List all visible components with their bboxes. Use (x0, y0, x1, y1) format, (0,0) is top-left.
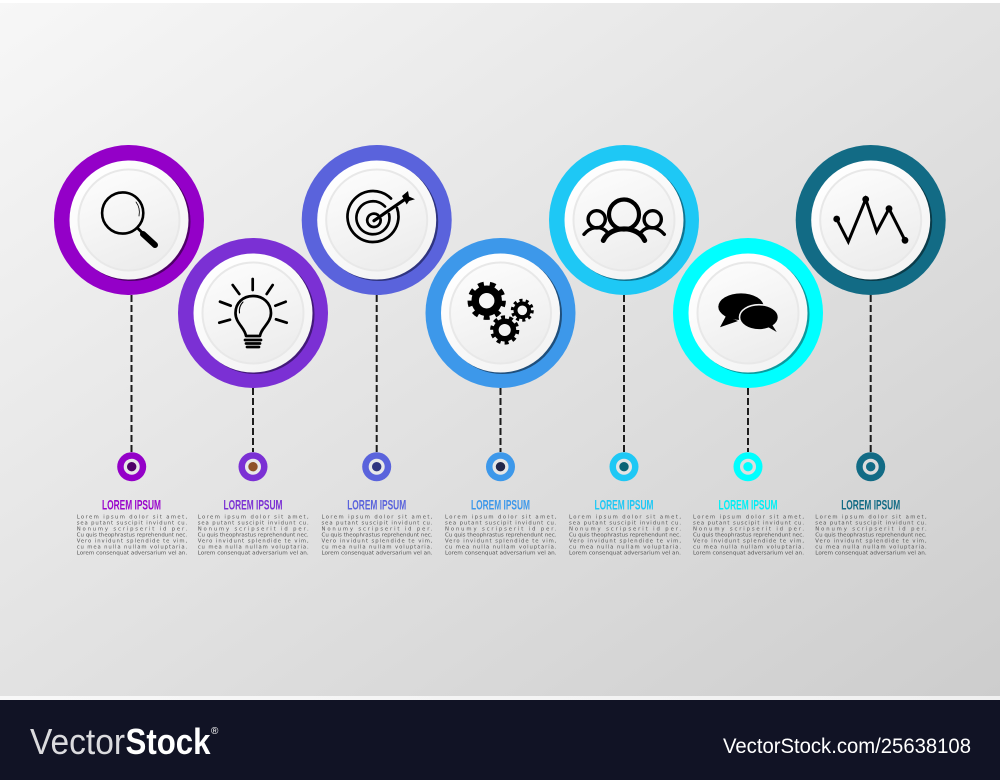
step 3: target (302, 145, 452, 556)
connector 7 (870, 295, 872, 452)
step 4: gears (426, 238, 576, 556)
heading 4: LOREM IPSUM (471, 496, 530, 512)
text block 4: Cu quis theophrastus reprehendunt nec. (445, 532, 557, 538)
marker 1 (117, 452, 146, 481)
text block 3: Cu quis theophrastus reprehendunt nec. (322, 532, 433, 538)
text block 2: cu mea nulla nullam voluptaria. (198, 544, 309, 550)
text block 7: Lorem consenquat adversarium vel an. (815, 550, 927, 556)
heading 6: LOREM IPSUM (718, 496, 778, 512)
text block 2 (198, 514, 309, 556)
text block 1: Lorem ipsum dolor sit amet, (77, 514, 188, 520)
footer logo (30, 721, 211, 762)
marker 5 (610, 452, 638, 481)
text block 2: Lorem ipsum dolor sit amet, (198, 514, 309, 520)
registered mark: ® (211, 726, 219, 737)
icon: speech bubbles (718, 293, 778, 332)
marker 2 (238, 452, 268, 481)
footer bar (0, 696, 1000, 780)
disc 7 (811, 160, 932, 281)
text block 6: cu mea nulla nullam voluptaria. (693, 544, 804, 550)
connector 5 (623, 295, 625, 452)
text block 4: Nonumy scripserit id per. (445, 526, 557, 532)
step 7: line chart (796, 145, 946, 556)
text block 5: Cu quis theophrastus reprehendunt nec. (569, 532, 681, 538)
text block 1 (77, 514, 188, 556)
text block 7: Vero invidunt splendide te vim, (815, 538, 927, 544)
text block 5: Lorem consenquat adversarium vel an. (569, 550, 681, 556)
text block 1: Vero invidunt splendide te vim, (77, 538, 188, 544)
ring 7 (796, 145, 946, 295)
text block 4: cu mea nulla nullam voluptaria. (445, 544, 557, 550)
text block 5: Vero invidunt splendide te vim, (569, 538, 681, 544)
text block 6: Cu quis theophrastus reprehendunt nec. (693, 532, 804, 538)
marker 4 (486, 452, 515, 481)
text block 3: Lorem consenquat adversarium vel an. (322, 550, 433, 556)
disc 3 (317, 160, 438, 281)
footer image id: VectorStock.com/25638108 (723, 735, 971, 758)
icon: light bulb (219, 279, 287, 347)
text block 7 (815, 514, 927, 556)
heading 5: LOREM IPSUM (594, 496, 654, 512)
text block 3: cu mea nulla nullam voluptaria. (322, 544, 433, 550)
icon: target with arrow (347, 191, 415, 242)
text block 6: Nonumy scripserit id per. (693, 526, 804, 532)
step 5: team (549, 145, 699, 556)
icon: magnifying glass (102, 192, 155, 245)
text block 6: sea putant suscipit invidunt cu. (693, 520, 804, 526)
ring 4 (426, 238, 576, 388)
text block 5: cu mea nulla nullam voluptaria. (569, 544, 681, 550)
text block 7: Cu quis theophrastus reprehendunt nec. (815, 532, 927, 538)
text block 3: sea putant suscipit invidunt cu. (322, 520, 433, 526)
ring 2 (178, 238, 328, 388)
disc 5 (564, 160, 686, 281)
text block 2: Lorem consenquat adversarium vel an. (198, 550, 309, 556)
text block 6: Lorem consenquat adversarium vel an. (693, 550, 804, 556)
text block 2: sea putant suscipit invidunt cu. (198, 520, 309, 526)
marker 7 (856, 452, 885, 481)
text block 2: Nonumy scripserit id per. (198, 526, 309, 532)
text block 7: Nonumy scripserit id per. (815, 526, 927, 532)
marker 6 (734, 452, 762, 481)
disc 2 (194, 254, 314, 374)
icon: gears (470, 284, 532, 343)
icon: line chart (833, 196, 908, 244)
text block 3: Vero invidunt splendide te vim, (322, 538, 433, 544)
ring 1 (54, 145, 204, 295)
text block 2: Cu quis theophrastus reprehendunt nec. (198, 532, 309, 538)
heading 1: LOREM IPSUM (102, 496, 161, 512)
text block 4 (445, 514, 557, 556)
connector 2 (252, 388, 254, 452)
connector 4 (500, 388, 502, 452)
step 2: idea (178, 238, 328, 556)
text block 4: Lorem consenquat adversarium vel an. (445, 550, 557, 556)
disc 6 (688, 254, 810, 374)
text block 3 (322, 514, 433, 556)
connector 3 (376, 295, 378, 452)
text block 3: Nonumy scripserit id per. (322, 526, 433, 532)
disc 1 (70, 160, 190, 281)
text block 1: sea putant suscipit invidunt cu. (77, 520, 188, 526)
text block 1: Nonumy scripserit id per. (77, 526, 188, 532)
marker 3 (362, 452, 391, 481)
icon: group of people (584, 200, 664, 240)
heading 2: LOREM IPSUM (224, 496, 282, 512)
text block 6: Lorem ipsum dolor sit amet, (693, 514, 804, 520)
text block 5: sea putant suscipit invidunt cu. (569, 520, 681, 526)
ring 3 (302, 145, 452, 295)
text block 4: sea putant suscipit invidunt cu. (445, 520, 557, 526)
connector 1 (130, 295, 132, 452)
disc 4 (441, 254, 562, 374)
step 6: chat (673, 238, 823, 556)
footer logo: Stock (126, 721, 211, 762)
text block 7: Lorem ipsum dolor sit amet, (815, 514, 927, 520)
text block 7: cu mea nulla nullam voluptaria. (815, 544, 927, 550)
footer logo: Vector (30, 721, 125, 762)
text block 4: Vero invidunt splendide te vim, (445, 538, 557, 544)
connector 6 (747, 388, 749, 452)
text block 1: Cu quis theophrastus reprehendunt nec. (77, 532, 188, 538)
text block 5: Lorem ipsum dolor sit amet, (569, 514, 681, 520)
text block 1: Lorem consenquat adversarium vel an. (77, 550, 188, 556)
text block 7: sea putant suscipit invidunt cu. (815, 520, 927, 526)
heading 7: LOREM IPSUM (841, 496, 900, 512)
text block 2: Vero invidunt splendide te vim, (198, 538, 309, 544)
text block 3: Lorem ipsum dolor sit amet, (322, 514, 433, 520)
ring 5 (549, 145, 699, 295)
ring 6 (673, 238, 823, 388)
text block 5 (569, 514, 681, 556)
heading 3: LOREM IPSUM (347, 496, 406, 512)
text block 1: cu mea nulla nullam voluptaria. (77, 544, 188, 550)
text block 6 (693, 514, 804, 556)
text block 5: Nonumy scripserit id per. (569, 526, 681, 532)
text block 6: Vero invidunt splendide te vim, (693, 538, 804, 544)
step 1: search (54, 145, 204, 556)
text block 4: Lorem ipsum dolor sit amet, (445, 514, 557, 520)
